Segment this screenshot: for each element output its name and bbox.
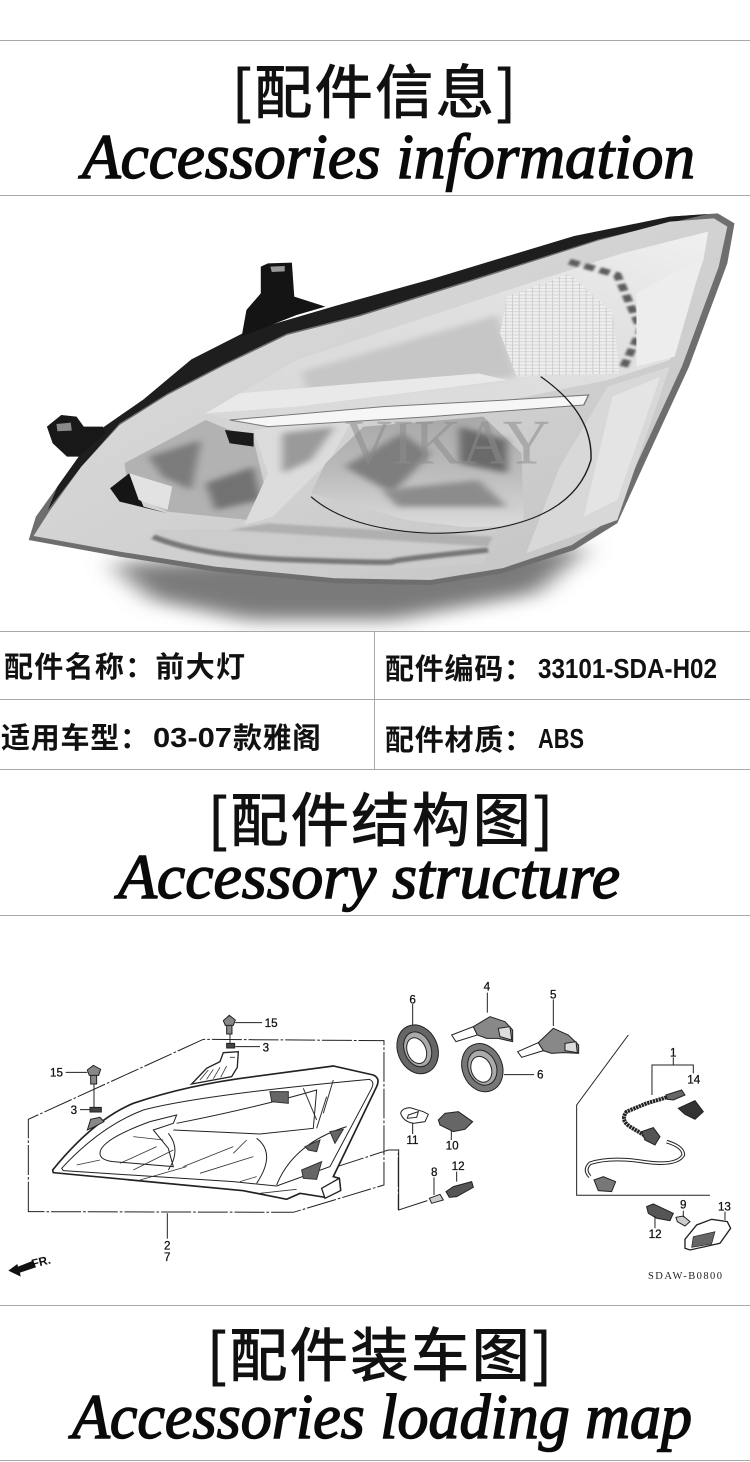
socket 10 — [438, 1112, 473, 1132]
front direction arrow: FR. — [30, 1253, 52, 1271]
exploded parts diagram — [8, 981, 731, 1282]
part numbers: 1 — [670, 1046, 676, 1059]
part numbers: 12 — [452, 1160, 465, 1173]
clip 14 — [678, 1101, 703, 1119]
bolt left — [87, 1065, 101, 1084]
cell: applicable model — [1, 715, 321, 757]
part numbers: 10 — [446, 1139, 459, 1152]
part numbers: 6 — [409, 993, 416, 1006]
side marker panel — [526, 367, 670, 553]
nuts — [90, 1043, 235, 1112]
lamp drop shadow — [110, 547, 589, 620]
cell: applicable model: 03-07 — [153, 722, 232, 753]
product photo: headlamp — [29, 213, 734, 620]
title: English: Accessory structure — [114, 841, 620, 912]
part numbers: 3 — [71, 1104, 77, 1117]
part numbers: 14 — [687, 1074, 701, 1087]
part numbers: 11 — [406, 1134, 418, 1147]
turn signal reflector — [500, 273, 620, 377]
left mounting tab — [47, 415, 105, 457]
cell: applicable model: 适用车型： — [1, 715, 149, 757]
seal left — [390, 1019, 446, 1080]
cell: material: ABS — [538, 723, 584, 754]
bulb 5 — [518, 1028, 579, 1057]
clear lens — [33, 218, 727, 580]
diagram: bulbs, seals, harness — [390, 981, 731, 1250]
section header: accessories loading map — [68, 1309, 692, 1452]
socket 12 upper — [446, 1182, 473, 1197]
title: Chinese: [配件信息] — [232, 46, 516, 130]
top mounting bracket — [242, 263, 325, 337]
section header: accessories information — [78, 46, 695, 192]
leader lines — [413, 993, 725, 1228]
title: English: Accessories information — [78, 121, 695, 192]
leader lines — [66, 1023, 262, 1239]
chrome brow — [230, 395, 589, 427]
upper chrome wedge — [341, 232, 708, 409]
diagram: headlamp line drawing — [8, 1015, 398, 1277]
part numbers: 5 — [550, 988, 556, 1001]
cell: part code — [385, 646, 717, 688]
watermark arc — [311, 377, 591, 533]
lamp hatching — [270, 1080, 343, 1179]
upper mounting bracket — [192, 1052, 238, 1084]
lamp outline — [53, 1066, 378, 1199]
title: English: Accessories loading map — [68, 1381, 692, 1452]
part numbers: 8 — [431, 1166, 437, 1179]
cell: part code: 配件编码： — [385, 646, 533, 688]
part numbers: 13 — [718, 1200, 731, 1213]
harness frame lines — [577, 1035, 710, 1195]
part numbers: 6 — [537, 1068, 543, 1081]
center cone — [244, 422, 350, 524]
title: Chinese: [配件结构图] — [208, 774, 553, 858]
part numbers: 12 — [649, 1228, 662, 1241]
part numbers: 15 — [50, 1066, 63, 1079]
part numbers — [50, 1017, 278, 1264]
cell: part name: 配件名称：前大灯 — [4, 644, 245, 686]
cell: applicable model: 款雅阁 — [233, 715, 321, 757]
small bulb 9 — [676, 1216, 690, 1226]
left reflector — [124, 420, 268, 520]
section header: accessory structure — [114, 774, 620, 912]
cell: part code: 33101-SDA-H02 — [538, 653, 717, 684]
title: Chinese: [配件装车图] — [207, 1309, 552, 1393]
diagram reference code: SDAW-B0800 — [648, 1271, 722, 1282]
part numbers: 4 — [484, 981, 491, 994]
black housing strip — [48, 214, 708, 510]
right reflector — [311, 417, 524, 530]
part numbers: 9 — [680, 1199, 686, 1212]
socket 12 lower — [647, 1204, 673, 1221]
seal right — [455, 1037, 510, 1098]
small bulb 8 — [429, 1194, 443, 1203]
part numbers: 2 — [164, 1239, 170, 1252]
part numbers: 3 — [263, 1041, 269, 1054]
part numbers: 7 — [164, 1251, 170, 1264]
lower reflector bands — [466, 526, 498, 530]
bolt top — [223, 1015, 235, 1034]
wedge bulb 11 — [401, 1108, 428, 1123]
watermark text: VIKAY — [345, 407, 550, 477]
part numbers: 15 — [265, 1017, 278, 1030]
cell: material: 配件材质： — [385, 717, 533, 759]
lower bracket — [322, 1178, 341, 1198]
front direction arrow — [8, 1253, 52, 1277]
dashed assembly box — [28, 1039, 398, 1212]
bulb 4 — [452, 1017, 513, 1042]
left mounting ear — [87, 1117, 104, 1130]
lamp housing — [29, 213, 734, 585]
part numbers — [406, 981, 731, 1241]
side marker 13 — [685, 1219, 731, 1250]
wiring harness — [587, 1090, 685, 1192]
